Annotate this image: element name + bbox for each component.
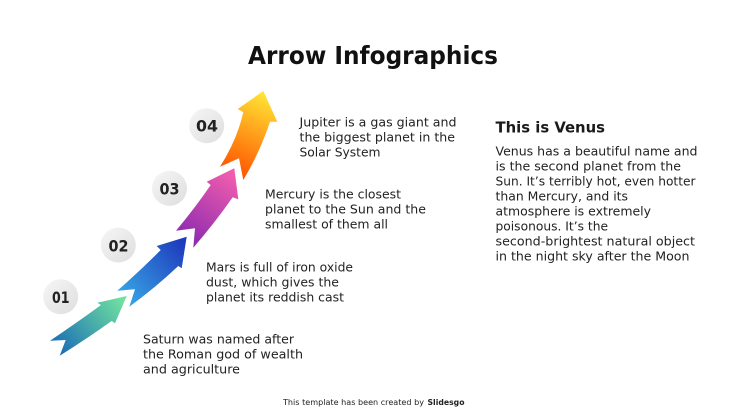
text: Venus description: is the second planet from the [496, 160, 681, 174]
number badge 01: 01 [52, 288, 70, 307]
text: Mars: planet its reddish cast [206, 290, 344, 304]
number badge 03: 03 [160, 180, 180, 198]
title: Arrow Infographics [248, 41, 498, 70]
text: Venus description: than Mercury, and its [496, 190, 628, 204]
text: Saturn: Saturn was named after [143, 332, 294, 346]
text: Jupiter: the biggest planet in the [300, 130, 455, 144]
footer credit: This template has been created by [282, 398, 424, 407]
text: Saturn: the Roman god of wealth [143, 348, 303, 362]
footer credit: Slidesgo [428, 398, 465, 407]
text: Mercury: smallest of them all [265, 218, 388, 232]
text: Venus description [496, 144, 698, 264]
text: Jupiter: Jupiter is a gas giant and [298, 116, 456, 130]
number badge 01 [43, 279, 78, 314]
text: Venus description: poisonous. It’s the [496, 220, 608, 234]
text: Mercury: Mercury is the closest [265, 188, 401, 202]
text: Saturn: and agriculture [143, 362, 240, 376]
text: Venus description: in the night sky after the Moon [496, 250, 690, 264]
text: Mars: Mars is full of iron oxide [206, 260, 353, 274]
arrow 2: blue [117, 237, 187, 307]
text: Saturn [143, 332, 303, 376]
text: Jupiter [298, 116, 456, 160]
text: Mercury: planet to the Sun and the [265, 202, 426, 216]
heading: This is Venus: This is Venus [496, 118, 605, 136]
text: Venus description: Sun. It’s terribly hot, even hotter [496, 174, 696, 188]
arrow 1: green-blue [50, 296, 127, 356]
number badge 04: 04 [196, 116, 218, 136]
text: Venus description: Venus has a beautiful name and [496, 144, 698, 158]
text: Jupiter: Solar System [300, 146, 380, 160]
arrow 3: purple-pink [176, 168, 238, 248]
text: Venus description: second-brightest natural object [496, 234, 695, 248]
number badge 02 [101, 228, 136, 262]
arrow 4: orange-yellow [220, 91, 277, 180]
text: Mars: dust, which gives the [206, 276, 339, 290]
text: Mars [206, 260, 353, 304]
number badge 02: 02 [108, 236, 128, 256]
text: Venus description: atmosphere is extremely [496, 204, 651, 218]
number badge 03 [152, 171, 187, 206]
number badge 04 [189, 108, 224, 143]
text: Mercury [265, 188, 426, 232]
